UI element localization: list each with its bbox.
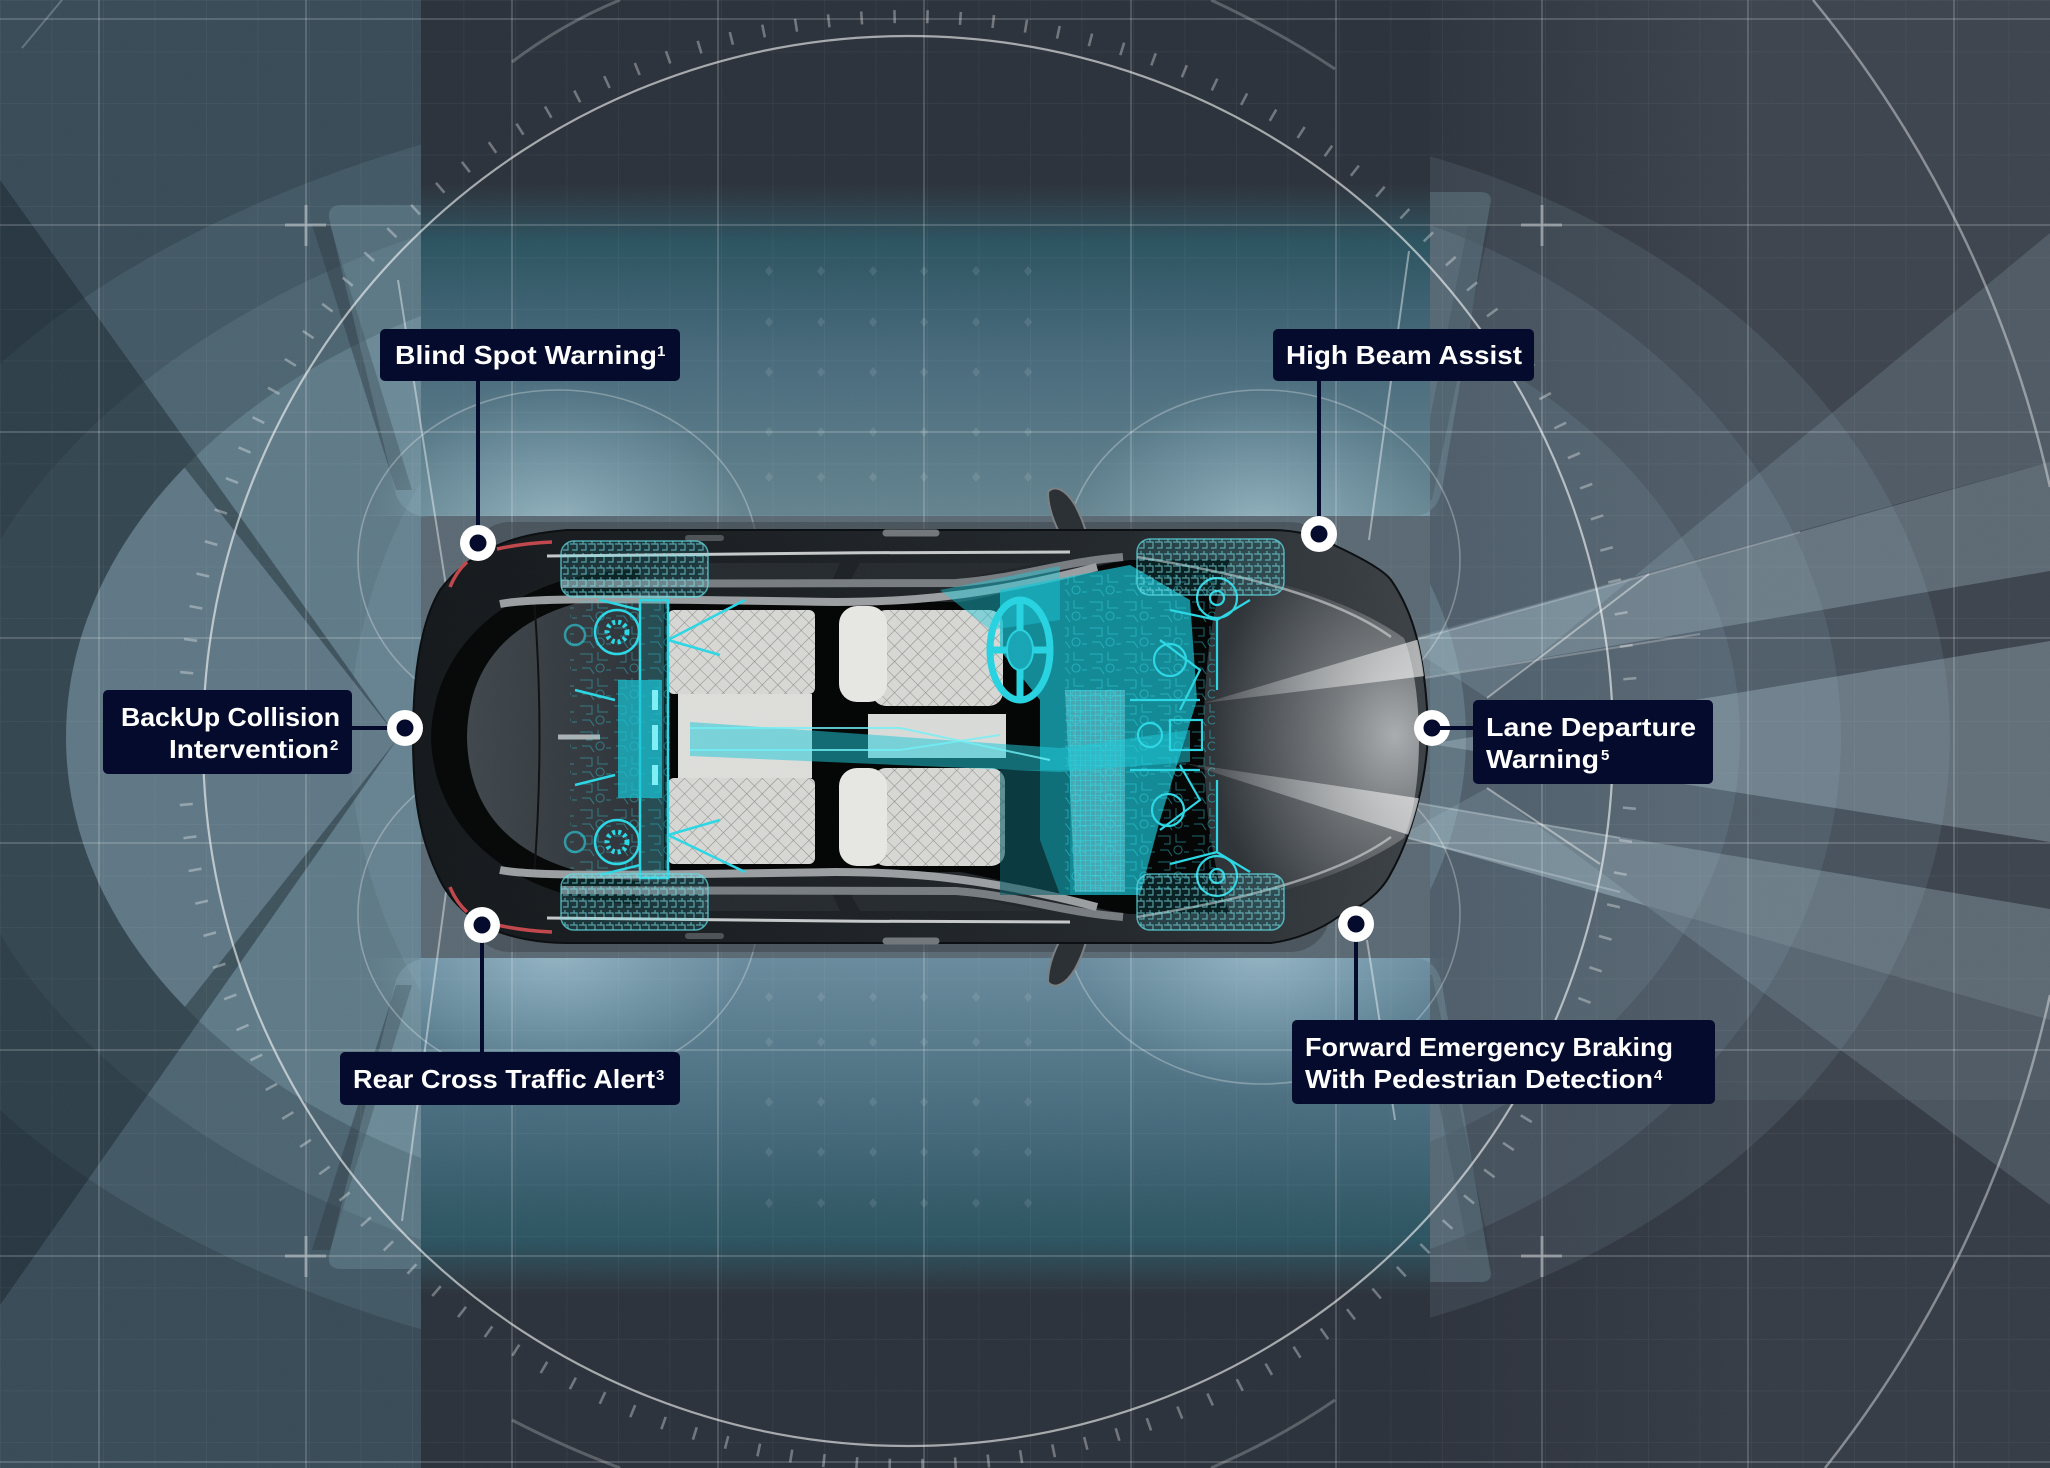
engine cyan block	[940, 565, 1215, 895]
trunk line and handle	[534, 598, 600, 876]
blind spot tiles	[329, 192, 1491, 1282]
rear sensor fan: left	[0, 180, 398, 1305]
radar ellipses: left	[0, 93, 1466, 1381]
label: Lane Departure Warning	[1414, 700, 1713, 784]
tire: front upper	[1137, 539, 1284, 595]
label: High Beam Assist: High Beam Assist	[1286, 340, 1522, 370]
diamond dot grid	[765, 266, 1032, 1208]
headlight beams on hood	[1185, 640, 1424, 835]
label: Lane Departure Warning: Warning	[1486, 744, 1599, 774]
label: Blind Spot Warning: 1	[657, 343, 665, 360]
central roadway band	[421, 0, 1430, 1468]
label: Forward Emergency Braking With Pedestrian Detection: 4	[1654, 1067, 1663, 1084]
label: Rear Cross Traffic Alert: 3	[656, 1067, 664, 1084]
label: Blind Spot Warning: Blind Spot Warning	[395, 340, 657, 370]
label: BackUp Collision Intervention	[103, 690, 423, 774]
label: Forward Emergency Braking With Pedestrian Detection	[1292, 906, 1715, 1104]
label: BackUp Collision Intervention: Intervention	[169, 734, 329, 764]
label: Forward Emergency Braking With Pedestrian Detection: Forward Emergency Braking	[1305, 1032, 1673, 1062]
front seats	[839, 606, 1005, 866]
car top view	[413, 488, 1450, 986]
thin sensor lines	[398, 251, 1800, 1221]
label: Lane Departure Warning: 5	[1601, 747, 1609, 764]
side rails and windows: upper, mirrored lower	[450, 533, 1391, 941]
front suspension cyan	[1130, 578, 1250, 896]
hood	[1218, 584, 1419, 890]
rear seats	[668, 610, 815, 864]
rear glass	[467, 592, 670, 882]
wheel zone glows	[400, 402, 1436, 1070]
label: Rear Cross Traffic Alert: Rear Cross Traffic Alert	[353, 1064, 655, 1094]
tire: rear upper	[561, 541, 708, 597]
rear subframe cyan	[565, 600, 745, 878]
cabin floor	[664, 560, 1230, 914]
label: BackUp Collision Intervention: 2	[330, 737, 338, 754]
rear black surround	[431, 570, 640, 904]
label: Lane Departure Warning: Lane Departure	[1486, 712, 1696, 742]
crosshairs	[285, 205, 1562, 1277]
label: High Beam Assist	[1273, 329, 1534, 552]
car body shell	[413, 530, 1428, 943]
car shadow	[470, 522, 1330, 952]
steering wheel	[990, 600, 1050, 700]
label: Forward Emergency Braking With Pedestrian Detection: With Pedestrian Detection	[1305, 1064, 1653, 1094]
drivetrain shaft	[690, 722, 1190, 772]
wheel range arcs	[358, 390, 1460, 1084]
side mirrors	[1048, 488, 1088, 986]
label: Blind Spot Warning	[380, 329, 680, 561]
tire: rear lower	[561, 874, 708, 930]
center console	[868, 714, 1006, 758]
tire: front lower	[1137, 874, 1284, 930]
radar ellipses: right	[350, 117, 1950, 1357]
label: BackUp Collision Intervention: BackUp Collision	[121, 702, 340, 732]
diagonal bands	[312, 225, 1490, 1250]
headlight beams	[1400, 233, 2050, 1205]
label: Rear Cross Traffic Alert	[340, 907, 680, 1105]
